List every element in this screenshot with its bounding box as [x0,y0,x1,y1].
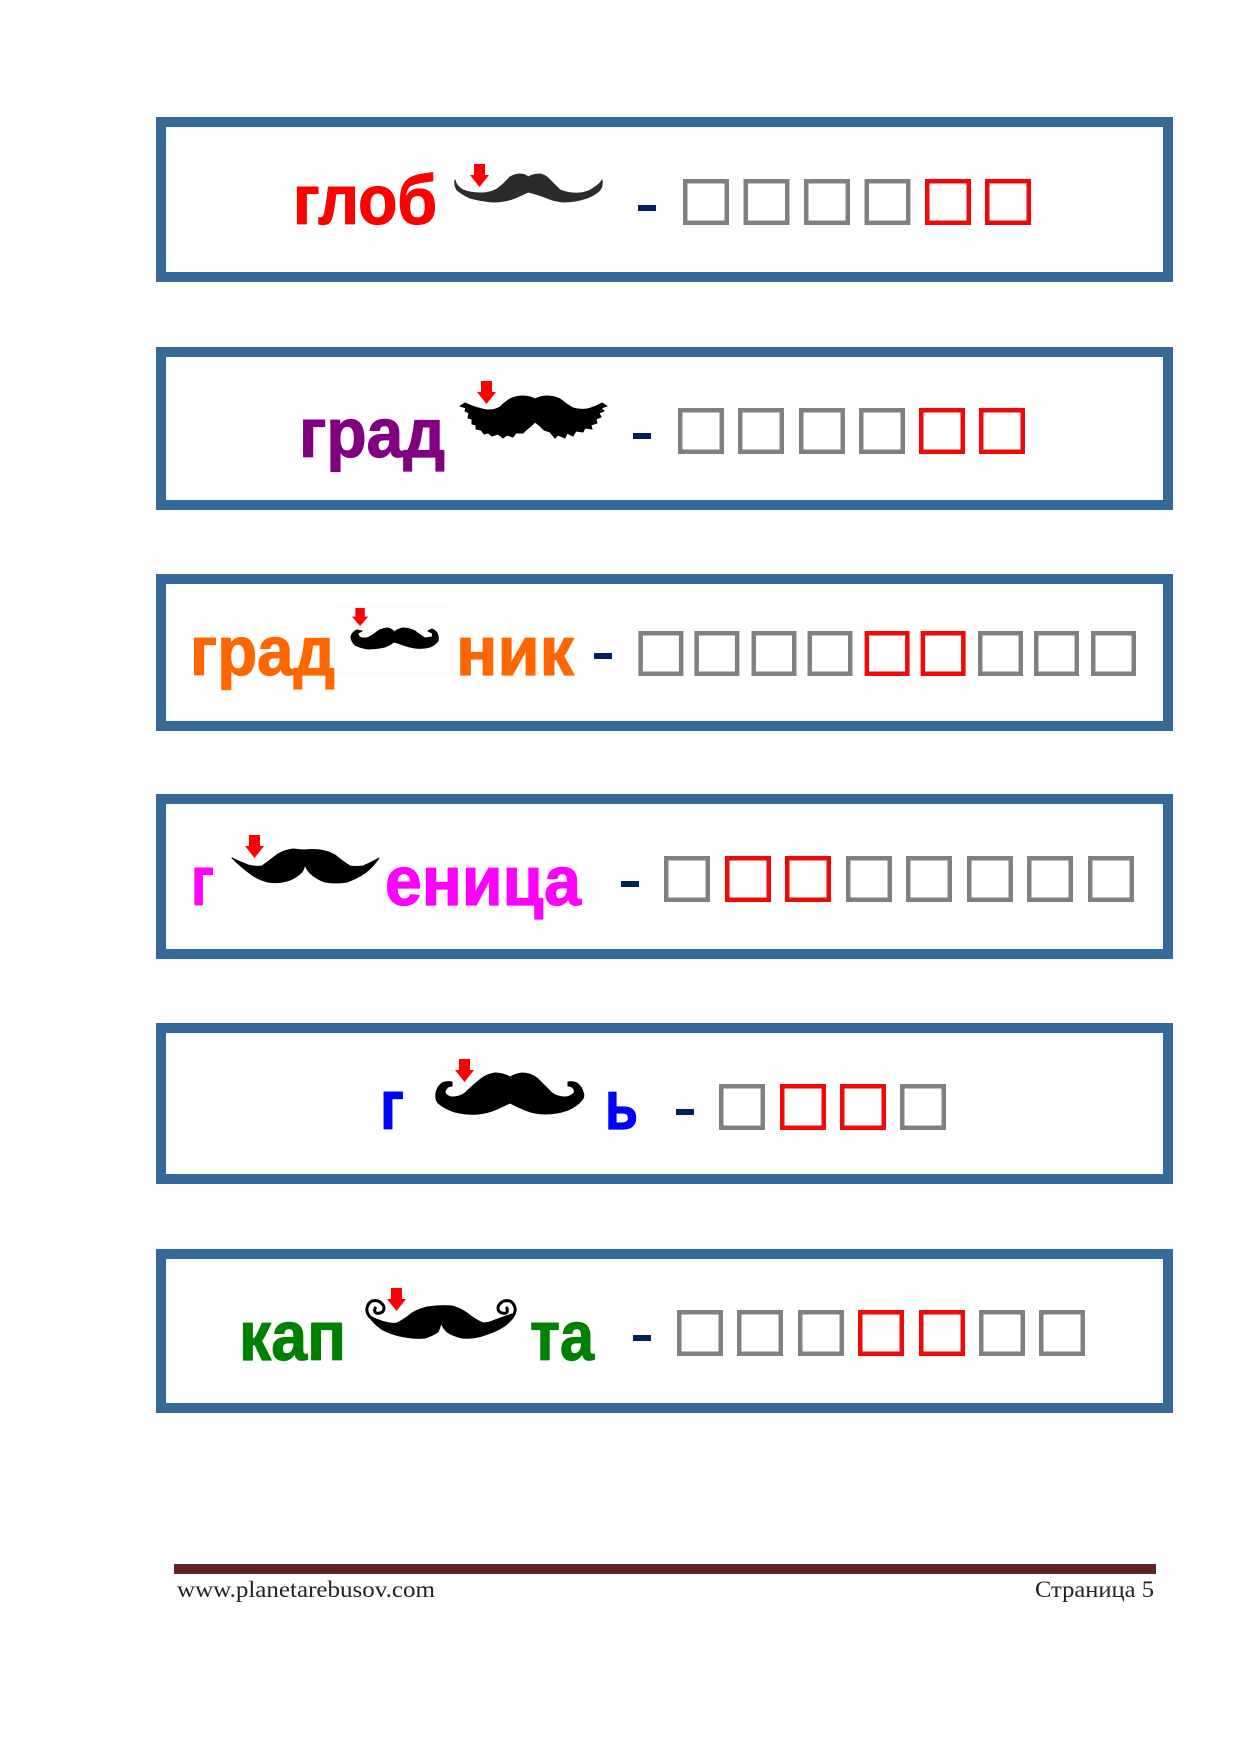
panel: rebus 6 [161,1254,1168,1408]
footer rule [174,1564,1156,1574]
footer website: www.planetarebusov.com [177,1577,435,1602]
word: глоб: глоб [293,161,437,239]
arrow 2 [477,381,496,404]
dash 4 [621,881,639,887]
arrow 3 [352,608,368,626]
arrow 5 [455,1059,474,1082]
answer squares 3 [641,633,1134,674]
dash 2 [633,433,651,439]
panel: rebus 2 [161,352,1168,505]
arrow 1 [470,164,489,187]
dash 1 [638,205,656,211]
icon: moustache 3 [351,628,438,649]
icon: moustache 2 [460,396,607,438]
footer [174,1564,1156,1602]
image patch behind moustache 3 [336,604,454,676]
icon: moustache 4 [232,849,379,883]
word: та: та [530,1297,595,1375]
answer squares 6 [679,1312,1083,1354]
icon: moustache 1 [455,174,602,202]
word: еница: еница [385,842,582,920]
answer squares 1 [685,181,1029,223]
answer squares 2 [680,410,1023,452]
answer squares 5 [721,1086,944,1128]
word: град: град [299,394,445,472]
icon: moustache 6 [367,1301,515,1338]
word: г: г [191,842,214,920]
icon: moustache 5 [436,1073,584,1114]
panel: rebus 1 [161,122,1168,277]
panel: rebus 3 [161,579,1168,726]
arrow 6 [387,1288,406,1311]
word: кап: кап [239,1297,346,1375]
panel: rebus 4 [161,799,1168,954]
footer page number: Страница 5 [1035,1577,1154,1602]
word: ник: ник [456,612,575,690]
panel: rebus 5 [161,1028,1168,1179]
arrow 4 [245,835,264,858]
dash 6 [633,1335,651,1341]
answer squares 4 [666,858,1132,900]
dash 5 [676,1109,694,1115]
dash 3 [594,653,612,659]
word: ь: ь [605,1066,638,1144]
word: град: град [190,612,335,690]
word: г: г [380,1066,404,1144]
